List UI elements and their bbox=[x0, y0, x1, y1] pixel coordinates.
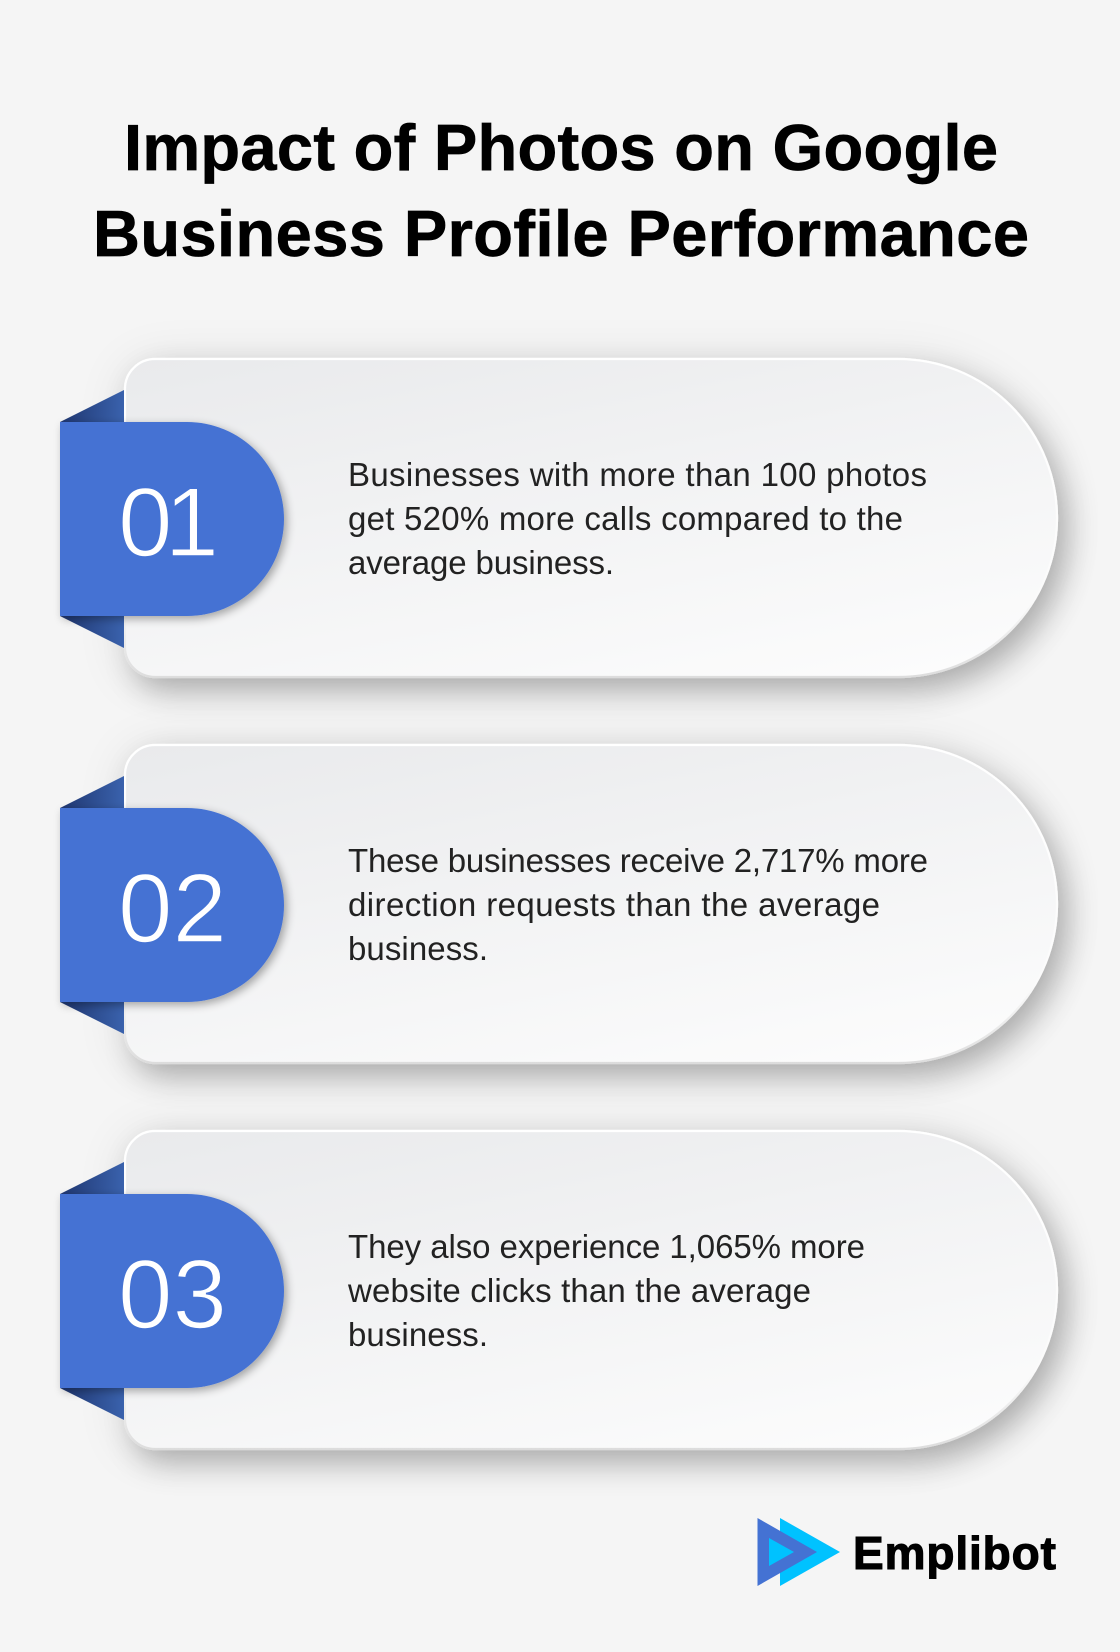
title: Business Profile Performance bbox=[93, 197, 1029, 270]
number badge 02 bbox=[60, 808, 284, 1002]
ribbon fold top 01 bbox=[60, 390, 124, 422]
panel: step 02 bbox=[60, 745, 1057, 1063]
card 02 bbox=[125, 745, 1057, 1063]
card 01 bbox=[125, 359, 1057, 677]
ribbon fold top 02 bbox=[60, 776, 124, 808]
text 03: website clicks than the average bbox=[347, 1272, 811, 1309]
ribbon fold bottom 03 bbox=[60, 1388, 124, 1420]
logo: Emplibot bbox=[758, 1518, 1056, 1586]
number badge 03: 03 bbox=[118, 1239, 227, 1349]
number badge 01 bbox=[60, 422, 284, 616]
ribbon fold bottom 01 bbox=[60, 616, 124, 648]
title: Impact of Photos on Google bbox=[124, 111, 998, 184]
text 03 bbox=[347, 1228, 865, 1353]
panel: step 03 bbox=[60, 1131, 1057, 1449]
text 03: They also experience 1,065% more bbox=[348, 1228, 865, 1265]
title bbox=[93, 111, 1029, 270]
wordmark: Emplibot bbox=[853, 1527, 1056, 1579]
panel: step 01 bbox=[60, 359, 1057, 677]
text 02: direction requests than the average bbox=[348, 886, 880, 923]
ribbon fold bottom 02 bbox=[60, 1002, 124, 1034]
text 03: business. bbox=[348, 1316, 488, 1353]
text 02: business. bbox=[348, 930, 488, 967]
text 01: average business. bbox=[348, 544, 614, 581]
card 03 bbox=[125, 1131, 1057, 1449]
text 02 bbox=[348, 842, 928, 967]
ribbon fold top 03 bbox=[60, 1162, 124, 1194]
text 01: Businesses with more than 100 photos bbox=[348, 456, 927, 493]
text 01: get 520% more calls compared to the bbox=[348, 500, 903, 537]
text 02: These businesses receive 2,717% more bbox=[348, 842, 928, 879]
number badge 03 bbox=[60, 1194, 284, 1388]
number badge 02: 02 bbox=[118, 853, 227, 963]
number badge 01: 01 bbox=[118, 467, 215, 577]
text 01 bbox=[348, 456, 927, 581]
icon: play triangles bbox=[758, 1518, 840, 1586]
